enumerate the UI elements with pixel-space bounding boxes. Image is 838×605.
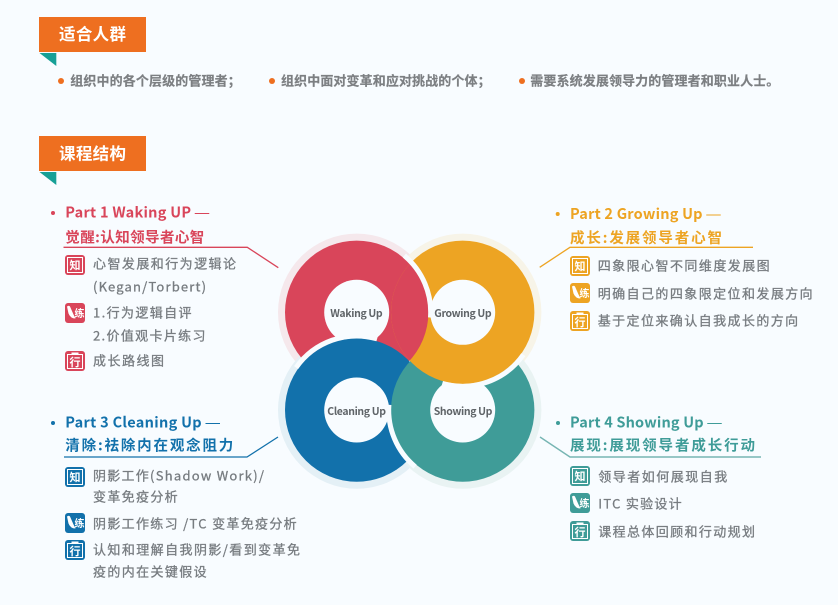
audience list [58, 70, 779, 90]
panel: part 3: 清除:祛除内在观念阻力 [65, 434, 233, 456]
panel: part 1: 成长路线图 [93, 351, 164, 370]
panel: part 1: 知 [70, 257, 80, 273]
panel: part 3 [51, 412, 300, 580]
panel: part 4: 领导者如何展现自我 [598, 466, 727, 485]
panel: part 2: 练 [580, 285, 590, 300]
four-ring diagram: Growing Up [434, 306, 492, 321]
heading tag: 课程结构: 课程结构 [59, 140, 126, 164]
panel: part 4: 行 [574, 524, 586, 540]
panel: part 4: 练 [580, 495, 590, 510]
audience list: 组织中面对变革和应对挑战的个体； [281, 70, 491, 90]
panel: part 4: 知 [574, 468, 586, 484]
panel: part 3: 阴影工作练习 /TC 变革免疫分析 [93, 514, 297, 533]
panel: part 3: 知 [70, 469, 80, 485]
panel: part 3: 练 [74, 515, 84, 530]
panel: part 3: 阴影工作(Shadow Work)/ [93, 465, 264, 484]
panel: part 1: 觉醒:认知领导者心智 [65, 226, 204, 248]
four-ring diagram: Cleaning Up [327, 404, 386, 419]
heading tag: 适合人群: 适合人群 [59, 21, 126, 45]
panel: part 3: 变革免疫分析 [93, 487, 178, 506]
panel: part 2: Part 2 Growing Up — [570, 203, 721, 224]
panel: part 2: 基于定位来确认自我成长的方向 [598, 311, 798, 330]
panel: part 1 [51, 202, 278, 371]
audience list: 需要系统发展领导力的管理者和职业人士。 [530, 70, 779, 90]
panel: part 1: Part 1 Waking UP — [65, 202, 210, 222]
panel: part 2: 行 [574, 314, 586, 330]
panel: part 4: 课程总体回顾和行动规划 [598, 522, 755, 541]
panel: part 3: 行 [70, 543, 80, 559]
audience list: 组织中的各个层级的管理者； [70, 70, 241, 90]
panel: part 3: 疫的内在关键假设 [93, 561, 207, 580]
panel: part 2: 成长:发展领导者心智 [570, 227, 722, 248]
panel: part 4: ITC 实验设计 [598, 494, 682, 513]
panel: part 3: 认知和理解自我阴影/看到变革免 [93, 540, 300, 559]
panel: part 1: 1.行为逻辑自评 [93, 303, 192, 322]
panel: part 2 [540, 203, 813, 331]
panel: part 4 [540, 412, 761, 541]
panel: part 1: 练 [74, 305, 84, 320]
four-ring diagram: Showing Up [434, 404, 493, 419]
panel: part 1: 行 [70, 354, 80, 370]
heading tag: 课程结构 [39, 136, 146, 185]
panel: part 4: 展现:展现领导者成长行动 [570, 434, 755, 456]
four-ring diagram: Waking Up [330, 306, 383, 321]
panel: part 2: 知 [574, 258, 586, 274]
panel: part 2: 明确自己的四象限定位和发展方向 [598, 284, 813, 303]
four-ring diagram [278, 234, 541, 489]
panel: part 1: 2.价值观卡片练习 [93, 326, 206, 345]
panel: part 2: 四象限心智不同维度发展图 [598, 256, 770, 275]
heading tag: 适合人群 [39, 17, 146, 66]
panel: part 1: (Kegan/Torbert) [93, 277, 206, 296]
panel: part 4: Part 4 Showing Up — [570, 412, 722, 433]
panel: part 3: Part 3 Cleaning Up — [65, 412, 220, 433]
panel: part 1: 心智发展和行为逻辑论 [93, 254, 236, 273]
